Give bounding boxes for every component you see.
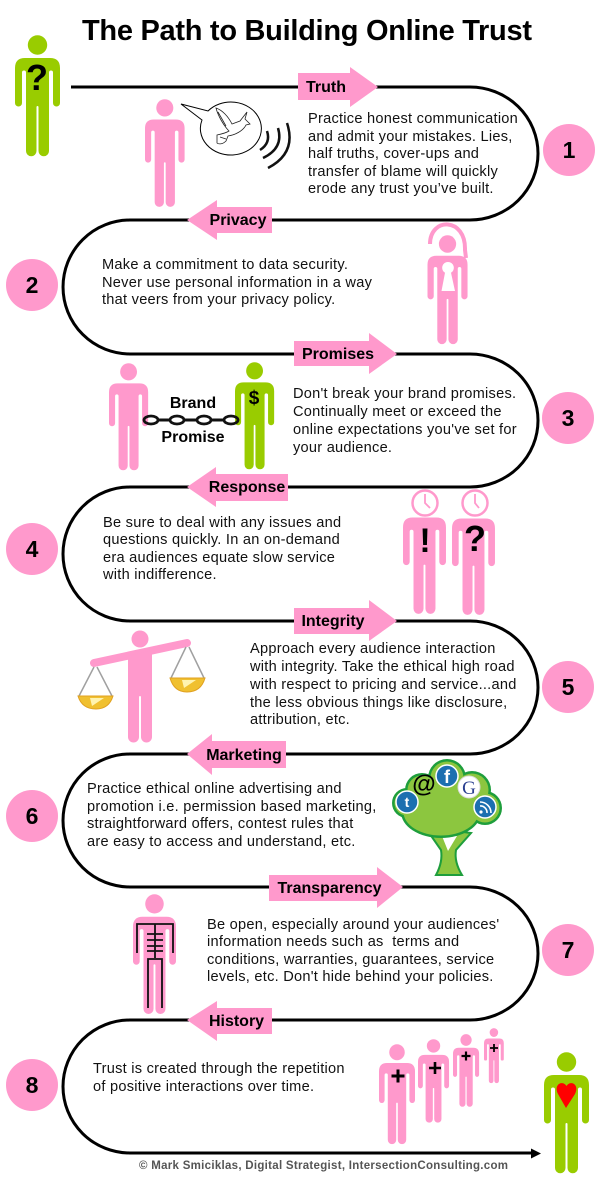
arrow: History [187, 1001, 272, 1041]
arrow: Integrity: Integrity [301, 613, 365, 630]
number 4: 4 [26, 536, 39, 562]
figure: green person with question mark [15, 35, 60, 156]
text: Promises: Don't break your brand promises. [293, 386, 516, 402]
brand promise chain: Promise [161, 429, 225, 446]
text: Marketing: Practice ethical online advertising and [87, 781, 342, 797]
icon: social media tree [392, 759, 502, 875]
arrow: Promises [294, 333, 397, 374]
text: Marketing: promotion i.e. permission based marketing, [87, 799, 377, 815]
number 7: 7 [562, 937, 574, 963]
icon: facebook: f [444, 767, 451, 787]
arrow: Privacy [187, 200, 272, 240]
text: Truth [308, 111, 518, 197]
number 8: 8 [26, 1072, 39, 1098]
number 6 [6, 790, 58, 842]
icon: at sign: @ [412, 771, 436, 798]
number 5 [542, 661, 594, 713]
text: Promises: your audience. [293, 440, 392, 456]
figure: person with clock and question: ? [464, 518, 486, 559]
icon: google: G [462, 778, 476, 799]
arrow: Promises: Promises [302, 346, 374, 363]
figure: green person with heart [544, 1052, 589, 1173]
figure: green person with dollar: $ [249, 388, 260, 409]
figure: positive interaction person 2 [418, 1039, 449, 1123]
arrow: Truth [298, 67, 378, 107]
number 6: 6 [26, 803, 38, 829]
figure: pink person brand [109, 363, 148, 470]
figure: positive interaction person 1 [379, 1044, 415, 1144]
text: Privacy: Never use personal information in a way [102, 275, 373, 291]
icon: twitter: t [405, 794, 410, 810]
figure: skeleton person [133, 894, 176, 1014]
arrow: Transparency: Transparency [277, 880, 382, 897]
number 4 [6, 523, 58, 575]
arrow: Privacy: Privacy [210, 212, 267, 229]
text: History [93, 1061, 345, 1095]
figure: person with lock [428, 224, 468, 344]
text: Response: questions quickly. In an on-demand [103, 532, 340, 548]
figure: person with clock and exclamation [403, 490, 446, 614]
text: Promises: Continually meet or exceed the [293, 404, 502, 420]
brand promise chain [144, 395, 238, 446]
text: Response: with indifference. [102, 567, 217, 583]
number 2 [6, 259, 58, 311]
credit line: © Mark Smiciklas, Digital Strategist, IntersectionConsulting.com [139, 1160, 508, 1172]
figure: positive interaction person 4 [484, 1028, 504, 1083]
text: Marketing [87, 781, 377, 850]
figure: green person with dollar [235, 362, 274, 469]
arrow: Truth: Truth [306, 79, 346, 96]
number 1: 1 [563, 137, 576, 163]
number 3 [542, 392, 594, 444]
text: Integrity: with respect to pricing and service...and [249, 677, 517, 693]
text: Privacy [102, 257, 373, 308]
icon: rss [474, 796, 496, 818]
text: Integrity: with integrity. Take the ethical high road [249, 659, 515, 675]
figure: balance scale person [78, 630, 205, 742]
text: Truth: and admit your mistakes. Lies, [308, 129, 513, 145]
text: Transparency: Be open, especially around your audiences' [207, 917, 499, 933]
arrow: Integrity [294, 600, 397, 641]
figure: pink person speaking [145, 99, 185, 207]
number 1 [543, 124, 595, 176]
arrow tip at end of path [531, 1148, 541, 1158]
text: Response [102, 515, 341, 583]
speech bubble with dove [181, 102, 261, 155]
text: Marketing: are easy to access and understand, etc. [87, 834, 356, 850]
brand promise chain: Brand [170, 395, 216, 412]
text: Integrity: Approach every audience interaction [250, 641, 496, 657]
text: History: Trust is created through the repetition [93, 1061, 345, 1077]
text: Transparency: conditions, warranties, guarantees, service [207, 952, 494, 968]
text: Integrity: the less obvious things like disclosure, [250, 695, 507, 711]
number 5: 5 [562, 674, 575, 700]
arrow: Response: Response [209, 479, 285, 496]
text: Transparency [207, 917, 499, 985]
winding path [63, 87, 538, 1153]
text: Promises [293, 386, 517, 456]
text: History: of positive interactions over time. [93, 1079, 314, 1095]
number 3: 3 [562, 405, 574, 431]
text: Response: Be sure to deal with any issues and [103, 515, 341, 531]
text: Integrity [249, 641, 517, 728]
figure: person with clock and question [452, 490, 495, 615]
title: The Path to Building Online Trust [82, 15, 532, 47]
arrow: Response [187, 467, 288, 507]
text: Promises: online expectations you've set for [293, 422, 517, 438]
icon: dove [216, 108, 250, 144]
text: Transparency: information needs such as terms and [207, 934, 459, 950]
figure: green person with question mark: ? [26, 57, 48, 98]
text: Truth: half truths, cover-ups and [308, 146, 479, 162]
text: Privacy: Make a commitment to data security. [102, 257, 348, 273]
arrow: Marketing [187, 734, 286, 775]
arrow: Transparency [269, 867, 403, 908]
number 7 [542, 924, 594, 976]
text: Marketing: straightforward offers, contest rules that [87, 816, 354, 832]
icon: sound waves [260, 123, 290, 168]
arrow: History: History [209, 1013, 264, 1030]
text: Truth: Practice honest communication [308, 111, 518, 127]
text: Response: era audiences equate slow service [103, 550, 335, 566]
text: Transparency: levels, etc. Don't hide behind your policies. [207, 969, 494, 985]
figure: positive interaction person 3 [453, 1034, 479, 1107]
arrow: Marketing: Marketing [206, 747, 282, 764]
text: Truth: erode any trust you’ve built. [308, 181, 494, 197]
figure: person with clock and exclamation: ! [419, 522, 431, 560]
number 2: 2 [26, 272, 38, 298]
text: Privacy: that veers from your privacy policy. [102, 292, 335, 308]
text: Truth: transfer of blame will quickly [308, 164, 498, 180]
text: Integrity: attribution, etc. [250, 712, 350, 728]
number 8 [6, 1059, 58, 1111]
